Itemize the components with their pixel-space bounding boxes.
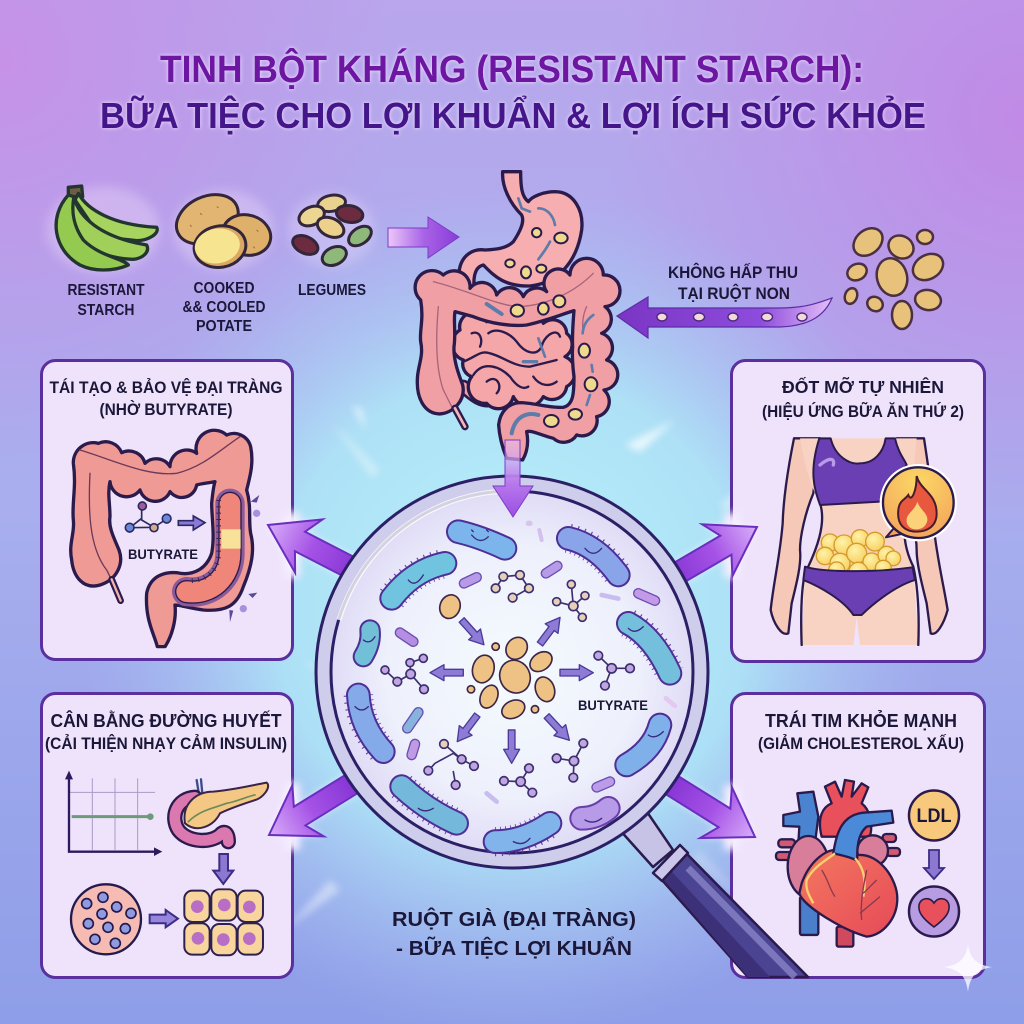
arrow: to colon panel <box>254 498 384 604</box>
label: butyrate: BUTYRATE <box>578 697 648 713</box>
heading: colon repair: TÁI TẠO & BẢO VỆ ĐẠI TRÀNG <box>50 378 282 397</box>
nutrient particles <box>505 228 597 427</box>
heading: blood sugar balance: CÂN BẰNG ĐƯỜNG HUYẾT <box>50 710 282 731</box>
arrow: down into colon <box>493 440 533 517</box>
large intestine <box>415 258 620 460</box>
label: not absorbed in small intestine <box>668 263 798 303</box>
label: resistant starch: RESISTANT <box>68 282 145 299</box>
heading: healthy heart: (GIẢM CHOLESTEROL XẤU) <box>758 734 964 753</box>
icon: pancreas <box>175 779 268 842</box>
title: TINH BỘT KHÁNG (RESISTANT STARCH): <box>160 46 864 91</box>
label: cooked and cooled potato: POTATE <box>196 318 252 335</box>
arrow: undigested starch toward colon <box>617 297 832 338</box>
chart: stable blood glucose <box>65 771 162 856</box>
heading: natural fat burning: ĐỐT MỠ TỰ NHIÊN <box>782 376 944 397</box>
heading: natural fat burning <box>762 376 964 421</box>
arrow: pancreas to cells <box>213 854 233 884</box>
arrow: to heart panel <box>642 751 771 862</box>
heading: healthy heart <box>758 710 964 753</box>
heading: colon repair <box>50 378 282 419</box>
short chain fatty acid molecules <box>381 571 634 797</box>
bacteria <box>355 530 670 844</box>
food source: bananas <box>47 186 160 273</box>
label: butyrate: BUTYRATE <box>128 546 198 562</box>
undigested starch granules <box>843 223 948 329</box>
icon: LDL <box>909 790 959 840</box>
icon: LDL: LDL <box>916 806 952 827</box>
heading: blood sugar balance: (CẢI THIỆN NHẠY CẢM INSULIN) <box>45 734 287 753</box>
heading: colon repair: (NHỜ BUTYRATE) <box>100 400 232 419</box>
fermentation arrows <box>430 613 593 763</box>
label: not absorbed in small intestine: TẠI RUỘT NON <box>678 284 790 303</box>
panel: healthy heart <box>732 694 984 978</box>
icon: blood glucose circle <box>71 884 141 954</box>
title: BỮA TIỆC CHO LỢI KHUẨN & LỢI ÍCH SỨC KHỎE <box>100 94 926 136</box>
heading: healthy heart: TRÁI TIM KHỎE MẠNH <box>765 710 957 731</box>
title <box>100 46 926 136</box>
small intestine <box>452 311 575 409</box>
food source: potatoes <box>168 185 275 272</box>
label: cooked and cooled potato: COOKED <box>194 280 254 297</box>
heart illustration <box>776 780 900 947</box>
arrow: glucose to cells <box>150 910 178 927</box>
icon: body cells <box>184 889 263 955</box>
arrow glows breaking the panel borders <box>284 512 740 850</box>
food source: legumes <box>288 193 375 269</box>
icon: flame badge <box>880 464 957 541</box>
sparkle <box>944 944 992 992</box>
label: not absorbed in small intestine: KHÔNG HẤP THU <box>668 263 798 282</box>
panel: colon repair <box>42 360 292 660</box>
label: cooked and cooled potato: && COOLED <box>182 299 266 316</box>
label: resistant starch <box>68 282 145 319</box>
label: legumes: LEGUMES <box>298 282 366 299</box>
stomach <box>459 172 582 287</box>
heading: blood sugar balance <box>45 710 287 753</box>
colon ridges <box>433 273 593 427</box>
icon: healthy heart badge <box>909 886 959 936</box>
colon illustration <box>71 430 260 647</box>
arrow: to blood sugar panel <box>253 749 383 861</box>
magnifying glass with large intestine microbiome <box>316 476 708 868</box>
body illustration <box>771 438 948 645</box>
small rods <box>400 566 655 787</box>
arrow: LDL decreases <box>924 850 944 879</box>
caption: large intestine: - BỮA TIỆC LỢI KHUẨN <box>396 936 632 960</box>
label: resistant starch: STARCH <box>78 302 134 319</box>
label: cooked and cooled potato <box>182 280 266 335</box>
molecule: butyrate <box>125 502 205 532</box>
arrow: to fat burning panel <box>643 501 772 611</box>
caption: large intestine <box>392 907 636 960</box>
flow marks <box>487 198 593 433</box>
fibre particles at the centre <box>436 592 558 722</box>
caption: large intestine: RUỘT GIÀ (ĐẠI TRÀNG) <box>392 907 636 931</box>
panel: natural fat burning <box>732 360 984 662</box>
arrow: food into stomach <box>388 217 459 258</box>
heading: natural fat burning: (HIỆU ỨNG BỮA ĂN THỨ 2) <box>762 401 964 421</box>
panel: blood sugar balance <box>42 694 292 978</box>
magnifier handle <box>618 806 808 977</box>
digestive tract <box>415 172 620 460</box>
